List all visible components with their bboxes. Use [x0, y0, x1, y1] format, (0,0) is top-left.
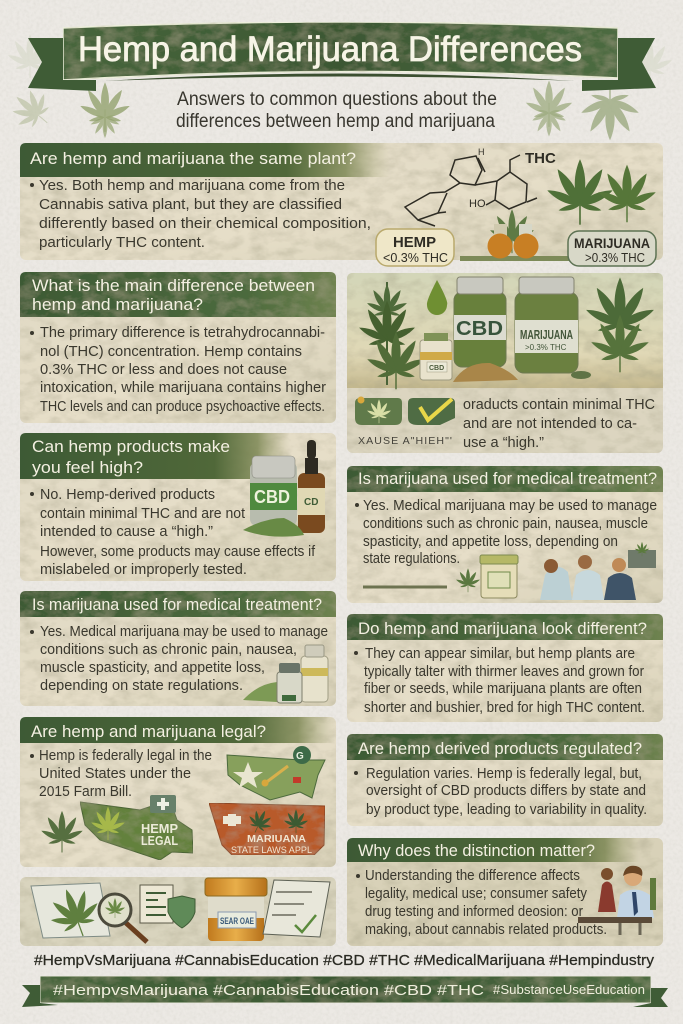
answer text: The primary difference is tetrahydrocannabi- [40, 325, 325, 341]
gift box plant [628, 542, 656, 568]
marijuana state laws map: MARIUANA [247, 833, 306, 845]
answer text: However, some products may cause effects if [40, 544, 316, 560]
panel: regulated [347, 734, 663, 826]
answer text [354, 766, 647, 818]
answer text: Regulation varies. Hemp is federally legal, but, [366, 766, 642, 782]
amber sample jar: SEAR OAE [220, 916, 254, 926]
THC molecule [405, 147, 556, 226]
medicine bottles [243, 645, 328, 703]
answer text: making, about cannabis related products. [365, 922, 607, 938]
answer text: differently based on their chemical composition, [39, 216, 371, 232]
answer text: THC levels and can produce psychoactive effects. [40, 399, 325, 415]
answer text: Yes. Both hemp and marijuana come from the [39, 178, 345, 194]
heading: Why does the distinction matter? [358, 842, 595, 860]
bottom hashtag banner [22, 976, 668, 1007]
answer text: conditions such as chronic pain, nausea, [40, 642, 297, 658]
hemp legal map [80, 795, 193, 860]
panel: look different [347, 614, 663, 722]
marijuana label: MARIJUANA [574, 235, 650, 251]
check badge [408, 398, 455, 425]
answer text: oraducts contain minimal THC [463, 397, 655, 413]
panel: documents and testing illustration [20, 877, 336, 946]
answer text: 2015 Farm Bill. [39, 784, 132, 800]
heading: you feel high? [32, 459, 143, 477]
hemp legal map: LEGAL [141, 834, 178, 848]
small US map: G [296, 751, 304, 762]
answer text [30, 748, 212, 800]
document with leaf [31, 880, 110, 945]
hemp label: <0.3% THC [383, 250, 448, 265]
watercolour leaves behind header [3, 34, 673, 140]
panel: medical treatment right [347, 466, 663, 603]
hemp plant right [584, 277, 656, 372]
hemp label [376, 229, 454, 266]
capsule [571, 371, 591, 379]
answer text: intended to cause a “high.” [40, 524, 213, 540]
hemp seeds [453, 363, 518, 382]
answer text [356, 868, 607, 938]
marijuana jar: >0.3% THC [525, 343, 567, 352]
answer text: Hemp is federally legal in the [39, 748, 212, 764]
heading: Are hemp and marijuana legal? [31, 723, 266, 741]
answer text [30, 487, 316, 578]
answer text: nol (THC) concentration. Hemp contains [40, 344, 302, 360]
leaf badge [355, 396, 402, 425]
answer text: oversight of CBD products differs by state and [366, 783, 646, 799]
heading [20, 433, 290, 479]
heading [20, 143, 390, 177]
answer text [30, 624, 328, 694]
banner text: #SubstanceUseEducation [493, 982, 645, 997]
panel: feel high [20, 433, 336, 581]
answer text [30, 325, 326, 415]
CBD jar [454, 277, 506, 367]
panel: same plant [20, 143, 663, 266]
answer text: legality, medical use; consumer safety [365, 886, 588, 902]
ribbon face [63, 22, 618, 80]
heading: Can hemp products make [32, 438, 230, 456]
answer text: contain minimal THC and are not [40, 506, 245, 522]
small CBD bottle [420, 333, 452, 380]
heading: Are hemp derived products regulated? [358, 740, 642, 758]
marijuana label: >0.3% THC [585, 251, 645, 265]
THC molecule: H [478, 147, 484, 157]
answer text: They can appear similar, but hemp plants are [365, 646, 635, 662]
THC molecule: THC [525, 150, 556, 167]
answer text: mislabeled or improperly tested. [40, 562, 247, 578]
signed document [263, 880, 330, 937]
answer text: state regulations. [363, 551, 460, 567]
answer text [354, 646, 645, 716]
heading: What is the main difference between [32, 277, 315, 295]
answer text: United States under the [39, 766, 191, 782]
heading: Is marijuana used for medical treatment? [32, 596, 322, 614]
magnifier [99, 894, 147, 942]
ribbon tails [22, 985, 668, 1007]
heading: Are hemp and marijuana the same plant? [30, 150, 356, 168]
CBD jar and dropper [243, 440, 325, 537]
panel: legal [20, 717, 336, 867]
answer text: Cannabis sativa plant, but they are classified [39, 197, 342, 213]
hemp label: HEMP [393, 234, 436, 251]
ribbon tails [28, 38, 656, 91]
answer text: 0.3% THC or less and does not cause [40, 362, 287, 378]
hemp plant [40, 811, 84, 852]
heading: hemp and marijuana? [32, 296, 203, 314]
answer text: Understanding the difference affects [365, 868, 580, 884]
banner text [53, 982, 645, 999]
consultation scene [363, 555, 636, 600]
marijuana state laws map [209, 803, 325, 856]
answer text [30, 178, 371, 251]
heading [347, 614, 663, 640]
subtitle: differences between hemp and marijuana [176, 111, 495, 132]
checklist and shield [140, 885, 195, 928]
subtitle [176, 89, 497, 132]
small US map [227, 746, 325, 800]
banner text: #HempvsMarijuana #CannabisEducation #CBD #THC [53, 982, 484, 999]
heading [347, 734, 663, 760]
subtitle: Answers to common questions about the [177, 89, 497, 110]
panel: CBD products illustration [347, 273, 663, 453]
panel: why distinction matters [347, 838, 663, 946]
marijuana state laws map: STATE LAWS APPL [231, 845, 312, 856]
answer text: drug testing and informed deosion: or [365, 904, 583, 920]
answer text: use a “high.” [463, 435, 544, 451]
answer text: spasticity, and appetite loss, depending on [363, 534, 618, 550]
marijuana jar: MARIJUANA [520, 328, 573, 342]
answer text: and are not intended to ca- [463, 416, 637, 432]
answer text: typically talter with thirmer leaves and grown for [364, 664, 644, 680]
panel: medical treatment left [20, 591, 336, 706]
marijuana jar [515, 277, 578, 373]
answer text: fiber or seeds, while marijuana plants are often [364, 681, 642, 697]
heading: Do hemp and marijuana look different? [358, 620, 647, 638]
heading [347, 466, 663, 492]
hemp plant left [358, 282, 426, 389]
answer text [355, 498, 657, 567]
CBD jar: CBD [456, 318, 503, 340]
answer text: muscle spasticity, and appetite loss, [40, 660, 265, 676]
amber sample jar [205, 878, 267, 941]
answer text: depending on state regulations. [40, 678, 243, 694]
heading [20, 717, 336, 743]
heading [20, 591, 336, 617]
oil jars and hemp [460, 209, 570, 261]
panel: main difference [20, 272, 336, 423]
answer text: intoxication, while marijuana contains higher [40, 380, 326, 396]
THC molecule: HO [469, 198, 486, 210]
answer text: by product type, leading to variability in quality. [366, 802, 647, 818]
CBD jar and dropper: CBD [254, 487, 290, 507]
heading [347, 838, 640, 862]
woman and man at desk [578, 866, 656, 935]
heading [20, 272, 336, 317]
answer text [463, 397, 655, 451]
marijuana label [568, 231, 656, 266]
title: Hemp and Marijuana Differences [78, 30, 582, 69]
CBD jar and dropper: CD [304, 497, 318, 508]
hemp legal map: HEMP [141, 822, 178, 836]
answer text: No. Hemp-derived products [40, 487, 215, 503]
title banner [28, 22, 656, 91]
stray caption: XAUSE A"HIEH"' [358, 436, 453, 447]
answer text: shorter and bushier, bred for high THC content. [364, 700, 645, 716]
answer text: Yes. Medical marijuana may be used to manage [363, 498, 657, 514]
answer text: conditions such as chronic pain, nausea, muscle [363, 516, 648, 532]
answer text: particularly THC content. [39, 235, 205, 251]
small CBD bottle: CBD [429, 365, 444, 372]
green oil drop [427, 280, 447, 315]
hashtag line: #HempVsMarijuana #CannabisEducation #CBD #THC #MedicalMarijuana #Hempindustry [34, 952, 655, 969]
answer text: Yes. Medical marijuana may be used to manage [40, 624, 328, 640]
scene backdrop [347, 273, 663, 388]
cannabis leaves [546, 159, 657, 225]
heading: Is marijuana used for medical treatment? [358, 470, 657, 488]
ribbon face [40, 976, 651, 1003]
